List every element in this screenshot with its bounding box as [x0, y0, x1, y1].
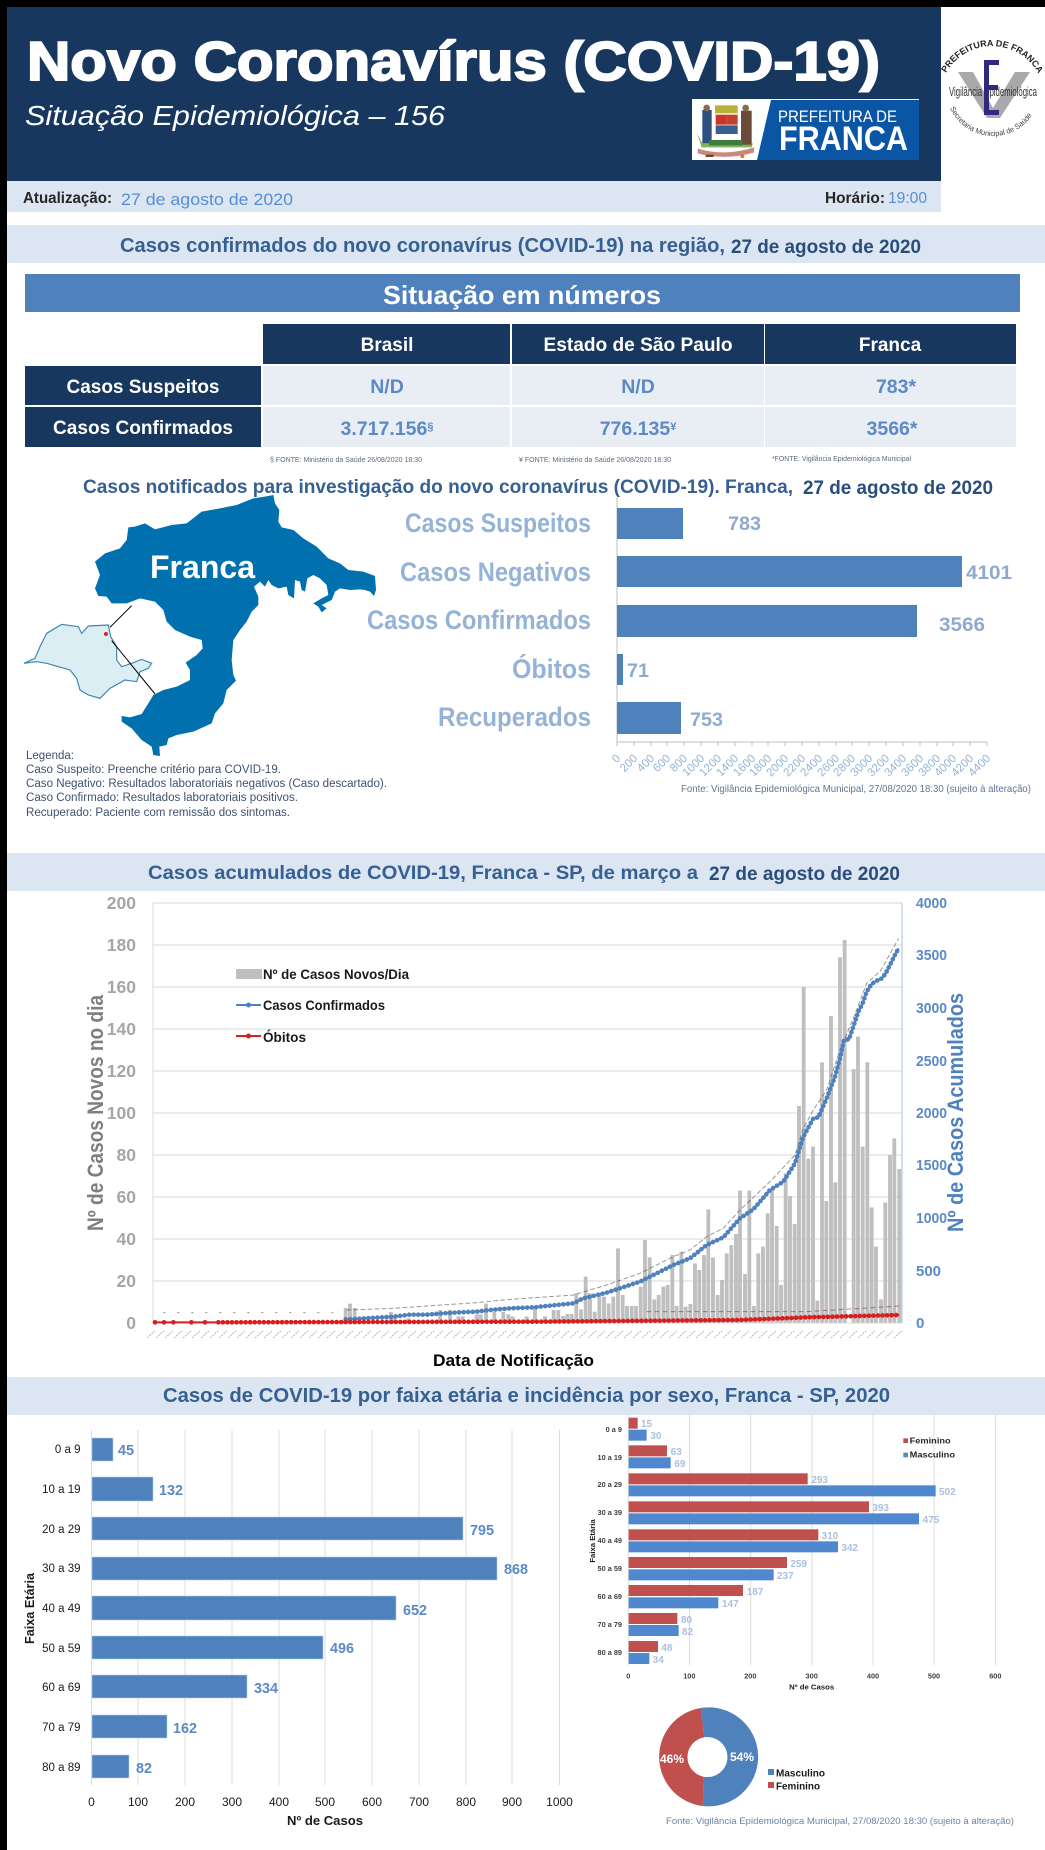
combo chart: casos acumulados: Nº de Casos Acumulados [943, 993, 968, 1232]
left axis labels: 200 [107, 893, 136, 913]
bar chart: casos notificados: 2600 [816, 753, 842, 779]
left axis labels: 120 [107, 1061, 136, 1081]
bar chart: incidência por sexo: 48 [661, 1643, 673, 1654]
bar chart: casos por faixa etária: 132 [159, 1483, 183, 1499]
bar chart: casos notificados: Casos Negativos [400, 557, 591, 587]
bar chart: casos por faixa etária: 800 [456, 1795, 476, 1809]
right axis labels: 1500 [916, 1157, 947, 1174]
bar chart: casos notificados [367, 498, 1012, 779]
left axis labels: 160 [107, 977, 136, 997]
legend text: Legenda: [26, 750, 74, 762]
section heading: faixa etária e sexo: Casos de COVID-19 por faixa etária e incidência por sexo, Franca - SP, 2020 [163, 1385, 890, 1407]
left axis labels: 100 [107, 1103, 136, 1123]
bar chart: incidência por sexo: Feminino [910, 1436, 951, 1446]
bar chart: casos notificados: 2200 [782, 753, 808, 779]
bar chart: casos por faixa etária: 50 a 59 [42, 1643, 80, 1655]
table: situação em números: Brasil [361, 335, 413, 356]
bar chart: incidência por sexo: 300 [806, 1672, 818, 1681]
bar chart: casos notificados: 1000 [681, 753, 707, 779]
bar chart: casos notificados: 4400 [967, 753, 993, 779]
right axis labels: 500 [916, 1263, 941, 1280]
bar chart: incidência por sexo: 70 a 79 [598, 1620, 622, 1629]
bar chart: casos por faixa etária: 1000 [546, 1795, 573, 1809]
bar chart: casos notificados: 3600 [900, 753, 926, 779]
legend text: Recuperado: Paciente com remissão dos sintomas. [26, 807, 290, 819]
subtitle: Situação Epidemiológica – 156 [25, 100, 445, 131]
right axis labels: 3000 [916, 1000, 947, 1017]
section heading: casos acumulados: Casos acumulados de COVID-19, Franca - SP, de março a [148, 862, 698, 884]
update bar: Atualização: [23, 190, 112, 207]
table: situação em números: N/D [621, 376, 655, 398]
bar chart: casos por faixa etária: 70 a 79 [42, 1722, 80, 1734]
header banner [7, 7, 941, 181]
section heading: casos confirmados na região [7, 225, 1045, 263]
bar chart: casos por faixa etária: 600 [362, 1795, 382, 1809]
logo: Vigilância Epidemiológica: Secretaria Municipal de Saúde [950, 106, 1032, 138]
panel heading: Situação em números [25, 274, 1020, 312]
bar chart: casos por faixa etária: 80 a 89 [42, 1762, 80, 1774]
table: situação em números: 3566* [867, 418, 918, 440]
left axis labels: 0 [126, 1313, 136, 1333]
right axis labels: 1000 [916, 1210, 947, 1227]
bar chart: casos notificados: 200 [618, 753, 640, 775]
right axis labels: 4000 [916, 895, 947, 912]
section heading: casos notificados: 27 de agosto de 2020 [803, 478, 993, 499]
bar chart: incidência por sexo: 80 [681, 1615, 693, 1626]
footnotes: ¥ FONTE: Ministério da Saúde 26/08/2020 18:30 [519, 455, 671, 464]
table: situação em números: § [427, 421, 433, 433]
bar chart: casos por faixa etária: 82 [136, 1761, 152, 1777]
bar chart: casos por faixa etária: 10 a 19 [42, 1484, 80, 1496]
bar chart: casos por faixa etária: 652 [403, 1603, 427, 1619]
table: situação em números: Franca [859, 335, 922, 356]
bar chart: incidência por sexo: 187 [747, 1587, 764, 1598]
bar chart: incidência por sexo: 10 a 19 [598, 1453, 622, 1462]
date tick marks [147, 1331, 902, 1338]
bar chart: incidência por sexo: 475 [923, 1515, 940, 1526]
bar chart: casos por faixa etária: Nº de Casos [287, 1813, 363, 1828]
bar chart: incidência por sexo: 69 [674, 1459, 686, 1470]
bar chart: casos por faixa etária: 496 [330, 1641, 354, 1657]
bar chart: incidência por sexo: 0 a 9 [606, 1425, 622, 1434]
donut chart: distribuição por sexo: Feminino [776, 1782, 820, 1792]
bar chart: casos por faixa etária: 0 a 9 [55, 1444, 80, 1456]
map: Franca municipality and São Paulo state: Franca [150, 549, 255, 585]
bar chart: incidência por sexo: 50 a 59 [598, 1564, 622, 1573]
bar chart: casos por faixa etária: 795 [470, 1523, 494, 1539]
bar chart: incidência por sexo: 500 [928, 1672, 940, 1681]
bar chart: casos por faixa etária: 900 [502, 1795, 522, 1809]
left axis labels: 80 [117, 1145, 136, 1165]
bar chart: casos notificados: 4200 [950, 753, 976, 779]
bar chart: casos por faixa etária: 500 [315, 1795, 335, 1809]
bar chart: casos por faixa etária: 162 [173, 1721, 197, 1737]
update bar: 19:00 [888, 190, 927, 207]
bar chart: casos notificados: 600 [651, 753, 673, 775]
bar chart: incidência por sexo: 34 [653, 1655, 664, 1666]
bar chart: casos notificados: 4101 [966, 563, 1012, 584]
bar chart: casos notificados: Óbitos [512, 653, 591, 684]
left axis labels: 140 [107, 1019, 136, 1039]
bar chart: casos notificados: 1600 [732, 753, 758, 779]
bar chart: incidência por sexo: 30 [650, 1431, 662, 1442]
footnotes: *FONTE: Vigilância Epidemiológica Municipal [772, 454, 911, 463]
bar chart: incidência por sexo: 100 [683, 1672, 695, 1681]
chart legend: Nº de Casos Novos/Dia [263, 966, 409, 982]
table: situação em números: Casos Confirmados [53, 418, 233, 439]
bar chart: casos por faixa etária: 30 a 39 [42, 1563, 80, 1575]
right axis labels: 2000 [916, 1105, 947, 1122]
section heading: faixa etária e sexo [7, 1377, 1045, 1415]
bar chart: incidência por sexo: 80 a 89 [598, 1648, 622, 1657]
axis titles: Nº de Casos Novos no dia [83, 994, 108, 1231]
bar chart: incidência por sexo: 30 a 39 [598, 1508, 622, 1517]
bar chart: casos notificados: 800 [668, 753, 690, 775]
logo: Prefeitura de Franca [692, 99, 919, 160]
legend text: Caso Confirmado: Resultados laboratoriais positivos. [26, 792, 298, 804]
bar chart: casos por faixa etária: 700 [409, 1795, 429, 1809]
bar chart: casos por faixa etária: 300 [222, 1795, 242, 1809]
footnotes: § FONTE: Ministério da Saúde 26/08/2020 18:30 [270, 455, 422, 464]
bar chart: incidência por sexo: Masculino [910, 1450, 955, 1460]
bar chart: casos notificados: 0 [610, 753, 623, 766]
bar chart: casos por faixa etária: 400 [269, 1795, 289, 1809]
table: situação em números [25, 324, 1016, 447]
bar chart: incidência por sexo: 147 [722, 1599, 739, 1610]
left axis labels: 40 [117, 1229, 136, 1249]
bar chart: casos notificados: 3000 [849, 753, 875, 779]
update bar: Horário: [825, 190, 885, 207]
chart legend: Óbitos [263, 1028, 306, 1045]
bar chart: casos por faixa etária: 334 [254, 1681, 278, 1697]
line: casos confirmados [346, 948, 899, 1319]
bar chart: casos notificados: 1200 [698, 753, 724, 779]
bar chart: casos por faixa etária: 200 [175, 1795, 195, 1809]
bar chart: casos notificados: 71 [627, 661, 649, 682]
table: situação em números: Casos Suspeitos [66, 377, 220, 398]
bar chart: casos notificados: Casos Confirmados [367, 605, 591, 635]
bar chart: casos notificados: 3400 [883, 753, 909, 779]
bar chart: casos notificados: 3566 [939, 615, 985, 636]
logo: Prefeitura de Franca: PREFEITURA DE [778, 107, 897, 126]
logo: Vigilância Epidemiológica: PREFEITURA DE FRANCA [941, 40, 1042, 74]
bar chart: incidência por sexo: 293 [811, 1475, 828, 1486]
bar chart: incidência por sexo: 40 a 49 [598, 1536, 622, 1545]
footnotes [270, 454, 911, 464]
legend text: Caso Negativo: Resultados laboratoriais negativos (Caso descartado). [26, 778, 387, 790]
bar chart: casos notificados: 4000 [933, 753, 959, 779]
bar chart: casos notificados: 400 [635, 753, 657, 775]
table: situação em números: 776.135 [600, 418, 670, 440]
bar chart: incidência por sexo: 63 [671, 1447, 682, 1458]
right axis labels: 3500 [916, 947, 947, 964]
table: situação em números: 3.717.156 [341, 418, 427, 440]
bar chart: casos notificados: Casos Suspeitos [405, 508, 591, 538]
bar chart: incidência por sexo: 310 [822, 1531, 839, 1542]
left axis labels: 60 [117, 1187, 136, 1207]
legend text [26, 750, 387, 819]
bar chart: incidência por sexo: 20 a 29 [598, 1480, 622, 1489]
bar chart: casos por faixa etária: 40 a 49 [42, 1603, 80, 1615]
line: óbitos [155, 1315, 899, 1322]
section heading: casos notificados: Casos notificados para investigação do novo coronavírus (COVID-19). Franca, [83, 477, 793, 498]
bar chart: incidência por sexo: Nº de Casos [789, 1683, 834, 1692]
bar chart: incidência por sexo: 502 [939, 1487, 956, 1498]
bar chart: casos por faixa etária: Faixa Etária [22, 1572, 37, 1644]
bar chart: casos por faixa etária: 60 a 69 [42, 1682, 80, 1694]
bar chart: casos por faixa etária [22, 1430, 573, 1828]
bar chart: casos notificados: 3200 [866, 753, 892, 779]
bars: novos casos por dia [346, 940, 899, 1323]
donut chart: distribuição por sexo: 46% [660, 1752, 684, 1766]
bar chart: casos notificados: 2800 [832, 753, 858, 779]
panel heading: Situação em números: Situação em números [383, 280, 661, 310]
bar chart: casos notificados: 2000 [765, 753, 791, 779]
bar chart: casos notificados: 1800 [748, 753, 774, 779]
bar chart: incidência por sexo: 237 [777, 1571, 794, 1582]
bar chart: incidência por sexo: 200 [744, 1672, 756, 1681]
section heading: casos confirmados na região: 27 de agosto de 2020 [731, 237, 921, 258]
logo: Prefeitura de Franca: FRANCA [779, 120, 908, 158]
chart legend [236, 966, 409, 1045]
bar chart: incidência por sexo: 259 [790, 1559, 807, 1570]
source note: Fonte: Vigilância Epidemiológica Municipal, 27/08/2020 18:30 (sujeito à alteração) [681, 784, 1031, 795]
left axis labels: 20 [117, 1271, 136, 1291]
legend text: Caso Suspeito: Preenche critério para COVID-19. [26, 764, 281, 776]
update bar [7, 181, 941, 212]
logo: Vigilância Epidemiológica [941, 40, 1042, 138]
right axis labels [916, 895, 947, 1332]
bar chart: casos por faixa etária: 45 [118, 1443, 134, 1459]
combo chart: casos acumulados [83, 893, 968, 1370]
table: situação em números: Estado de São Paulo [544, 335, 732, 356]
section heading: casos confirmados na região: Casos confirmados do novo coronavírus (COVID-19) na região, [120, 235, 725, 257]
table: situação em números: 783* [876, 376, 916, 398]
bar chart: casos notificados: 2400 [799, 753, 825, 779]
section heading: casos acumulados: 27 de agosto de 2020 [709, 864, 900, 885]
right axis labels: 2500 [916, 1053, 947, 1070]
bar chart: casos notificados: 783 [728, 514, 761, 535]
map: Franca municipality and São Paulo state [24, 495, 376, 756]
bar chart: incidência por sexo: 400 [867, 1672, 879, 1681]
bar chart: incidência por sexo: 15 [641, 1419, 653, 1430]
bar chart: casos notificados: 1400 [715, 753, 741, 779]
right axis labels: 0 [916, 1315, 924, 1332]
donut chart: distribuição por sexo: Masculino [776, 1768, 825, 1780]
bar chart: incidência por sexo: 393 [872, 1503, 889, 1514]
left axis labels: 180 [107, 935, 136, 955]
title: Novo Coronavírus (COVID-19) [27, 30, 880, 92]
bar chart: incidência por sexo: Faixa Etária [588, 1518, 597, 1563]
bar chart: casos por faixa etária: 100 [128, 1795, 148, 1809]
table: situação em números: ¥ [670, 421, 677, 433]
bar chart: incidência por sexo: 82 [682, 1627, 694, 1638]
bar chart: incidência por sexo: 342 [841, 1543, 858, 1554]
bar chart: casos notificados: 3800 [917, 753, 943, 779]
bar chart: casos por faixa etária: 0 [88, 1795, 95, 1809]
bar chart: casos notificados: Recuperados [438, 702, 591, 732]
chart legend: Casos Confirmados [263, 997, 385, 1013]
update bar: 27 de agosto de 2020 [121, 190, 293, 209]
bar chart: incidência por sexo: 0 [626, 1672, 630, 1681]
bar chart: casos notificados: 753 [690, 710, 723, 731]
bar chart: casos por faixa etária: 868 [504, 1562, 528, 1578]
table: situação em números: N/D [370, 376, 404, 398]
data-label marks [347, 938, 899, 1310]
left axis labels [107, 893, 136, 1333]
combo chart: casos acumulados: Data de Notificação [433, 1351, 594, 1370]
bar chart: incidência por sexo: 60 a 69 [598, 1592, 622, 1601]
bar chart: incidência por sexo [588, 1415, 1001, 1692]
donut chart: distribuição por sexo: 54% [730, 1750, 754, 1764]
bar chart: casos por faixa etária: 20 a 29 [42, 1524, 80, 1536]
section heading: casos acumulados [7, 853, 1045, 891]
donut chart: distribuição por sexo [659, 1707, 825, 1806]
bar chart: incidência por sexo: 600 [989, 1672, 1001, 1681]
source note: Fonte: Vigilância Epidemiológica Municipal, 27/08/2020 18:30 (sujeito à alteração) [666, 1816, 1014, 1827]
